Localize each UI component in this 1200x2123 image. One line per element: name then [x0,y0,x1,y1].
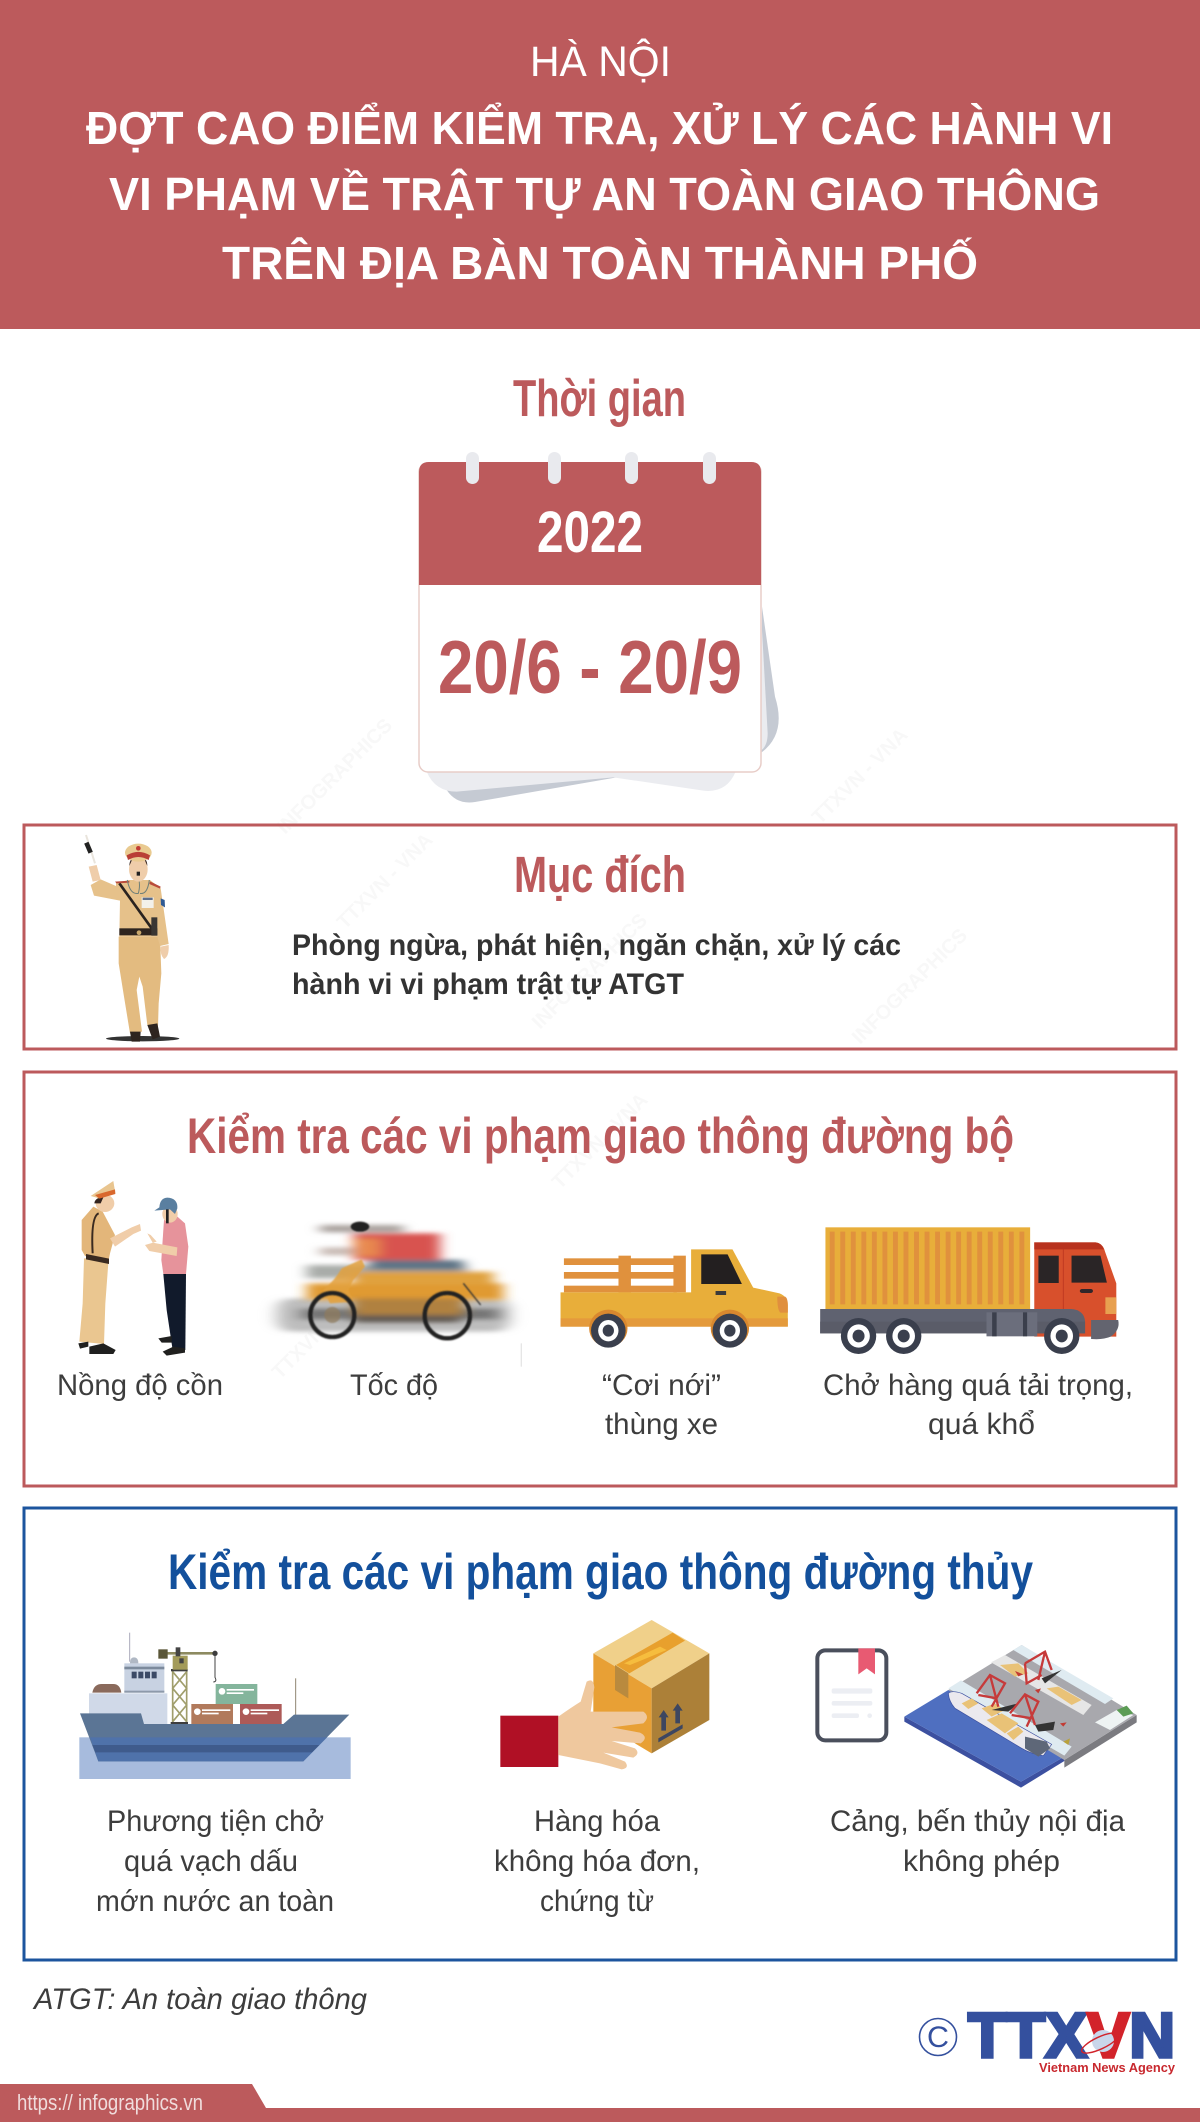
labels: waterway violations: Phương tiện chở [107,1805,324,1838]
watermarks: INFOGRAPHICS [273,715,397,839]
watermarks: INFOGRAPHICS [848,925,972,1049]
icon: traffic police officer [86,835,179,1042]
labels: road violations: “Cơi nới” [602,1369,721,1402]
labels: road violations: Tốc độ [350,1369,438,1402]
watermarks: INFOGRAPHICS [528,910,652,1034]
purpose text: Phòng ngừa, phát hiện, ngăn chặn, xử lý các [292,929,901,962]
logo: TTXVN: Vietnam News Agency [1039,2060,1176,2075]
logo: TTXVN: C [927,2021,949,2054]
icon: container truck [820,1227,1119,1354]
purpose text: hành vi vi phạm trật tự ATGT [292,968,684,1001]
watermarks: TTXVN - VNA [548,1089,652,1194]
icon: isometric port [904,1645,1137,1788]
panel: waterway violations [24,1508,1176,1960]
watermarks: TTXVN - VNA [268,1279,372,1384]
labels: waterway violations: Hàng hóa [534,1805,660,1838]
title: location: HÀ NỘI [530,38,671,86]
icon: police and driver [78,1181,188,1356]
calendar back sheets [427,607,779,802]
labels: road violations [57,1369,1133,1441]
labels: waterway violations [96,1805,1125,1918]
icon: speeding motorbike [277,1222,522,1367]
heading: time: Thời gian [513,370,686,428]
calendar dates: 20/6 - 20/9 [438,625,742,709]
icon: pickup truck [561,1249,788,1348]
labels: waterway violations: Cảng, bến thủy nội địa [830,1805,1125,1838]
labels: road violations: Chở hàng quá tải trọng, [823,1369,1133,1402]
footer bar [0,2084,1200,2122]
watermarks [268,715,972,1384]
icon: cargo ship [79,1633,351,1779]
icon: document with bookmark [817,1648,886,1740]
watermarks: TTXVN - VNA [333,829,437,934]
watermarks: TTXVN - VNA [808,724,912,829]
logo: TTXVN: TTXVN [968,2001,1175,2071]
calendar year: 2022 [537,500,643,565]
labels: waterway violations: không hóa đơn, [494,1845,700,1878]
panel: purpose [24,825,1176,1049]
title: main headline: TRÊN ĐỊA BÀN TOÀN THÀNH PHỐ [222,237,978,289]
title: main headline: ĐỢT CAO ĐIỂM KIỂM TRA, XỬ LÝ CÁC HÀNH VI [86,102,1113,154]
labels: road violations: quá khổ [928,1408,1035,1441]
heading: road violations: Kiểm tra các vi phạm giao thông đường bộ [187,1108,1014,1164]
title banner [0,0,1200,329]
title: main headline: VI PHẠM VỀ TRẬT TỰ AN TOÀN GIAO THÔNG [109,168,1100,220]
title: main headline [86,102,1113,289]
calendar [419,452,779,802]
footnote: ATGT: An toàn giao thông [32,1983,367,2016]
panel: road violations [24,1072,1176,1486]
labels: waterway violations: quá vạch dấu [124,1845,298,1878]
labels: waterway violations: chứng từ [540,1885,654,1918]
footer url: https:// infographics.vn [17,2090,203,2115]
heading: purpose: Mục đích [514,846,686,903]
labels: waterway violations: mớn nước an toàn [96,1885,334,1918]
labels: road violations: Nồng độ cồn [57,1369,223,1402]
purpose text [292,929,901,1001]
labels: waterway violations: không phép [903,1845,1060,1878]
labels: road violations: thùng xe [605,1408,718,1441]
icon: hand holding box [500,1620,709,1769]
